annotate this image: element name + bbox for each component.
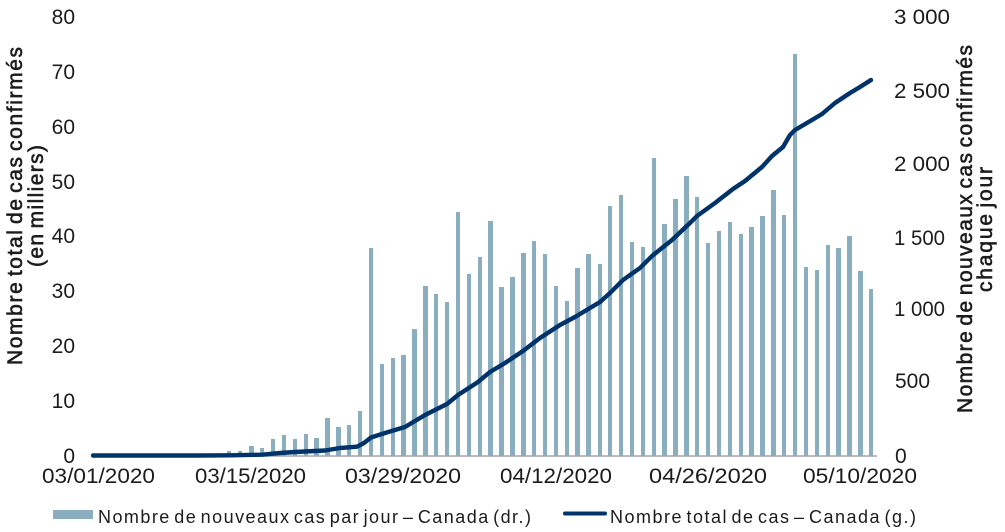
x axis date labels bbox=[42, 465, 917, 488]
left axis labels: 70 bbox=[52, 61, 75, 84]
right axis labels: 1 500 bbox=[894, 227, 945, 250]
right axis labels: 500 bbox=[895, 370, 930, 393]
x axis date labels: 03/01/2020 bbox=[42, 465, 155, 488]
x axis date labels: 04/12/2020 bbox=[500, 465, 612, 488]
right axis labels: 2 500 bbox=[894, 80, 950, 103]
legend: total cases: Nombre total de cas – Canada (g.) bbox=[610, 507, 916, 527]
left axis labels: 50 bbox=[52, 171, 75, 194]
x axis date labels: 03/15/2020 bbox=[195, 465, 306, 488]
left axis labels: 40 bbox=[52, 225, 75, 248]
left axis title bbox=[4, 47, 48, 365]
right axis title: Nombre de nouveaux cas confirmés bbox=[954, 45, 977, 413]
right axis title bbox=[954, 45, 997, 413]
legend: new cases: Nombre de nouveaux cas par jour – Canada (dr.) bbox=[98, 507, 531, 527]
left axis labels: 80 bbox=[52, 6, 75, 29]
left axis labels bbox=[52, 6, 75, 468]
right axis labels: 2 000 bbox=[894, 153, 950, 176]
right axis labels: 3 000 bbox=[894, 6, 950, 29]
bar series: new cases per day bbox=[227, 54, 873, 456]
x axis date labels: 05/10/2020 bbox=[803, 465, 917, 488]
left axis labels: 60 bbox=[52, 116, 75, 139]
left axis labels: 10 bbox=[52, 390, 75, 413]
left axis labels: 20 bbox=[52, 335, 75, 358]
right axis labels bbox=[894, 6, 950, 468]
x axis date labels: 04/26/2020 bbox=[649, 465, 767, 488]
left axis labels: 30 bbox=[52, 280, 75, 303]
x axis line bbox=[93, 455, 877, 457]
x axis date labels: 03/29/2020 bbox=[345, 465, 461, 488]
right axis labels: 0 bbox=[895, 445, 907, 468]
right axis labels: 1 000 bbox=[894, 298, 945, 321]
left axis title: Nombre total de cas confirmés bbox=[4, 47, 27, 365]
right axis title: chaque jour bbox=[974, 167, 997, 292]
left axis labels: 0 bbox=[63, 445, 75, 468]
left axis title: (en milliers) bbox=[25, 145, 48, 267]
line series: total cases bbox=[93, 80, 871, 456]
